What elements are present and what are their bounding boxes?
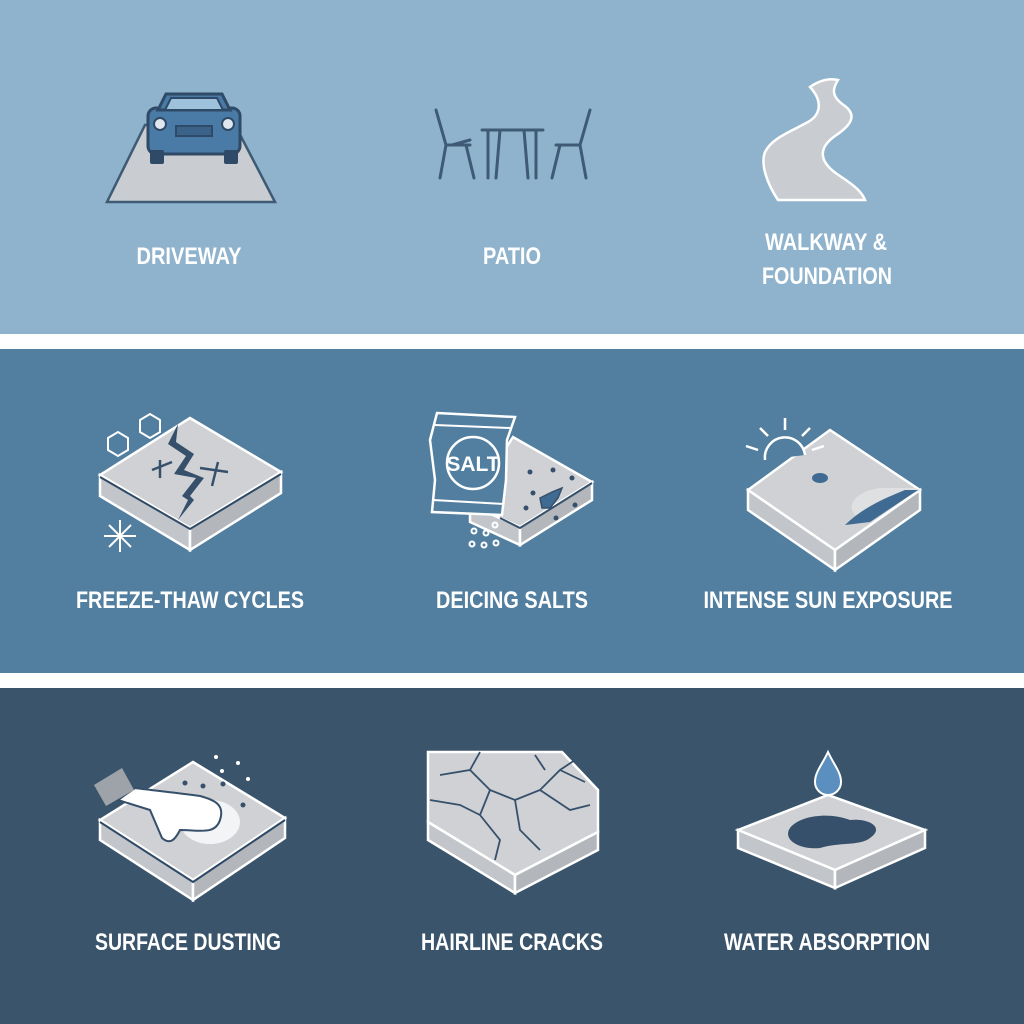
panel: damage [0, 688, 1024, 1024]
label: dusting: SURFACE DUSTING [95, 929, 281, 956]
icon: deicing salts: SALT [446, 453, 500, 476]
label: foundation: FOUNDATION [762, 263, 892, 290]
label: hairline cracks: HAIRLINE CRACKS [421, 929, 603, 956]
panel: locations [0, 0, 1024, 334]
icon: walkway [763, 79, 865, 200]
icon: deicing salts [430, 413, 592, 548]
label: driveway: DRIVEWAY [136, 243, 242, 270]
icon: hairline cracks [428, 752, 598, 893]
icon: water absorption [738, 752, 925, 888]
icon: patio [436, 110, 590, 178]
label: deicing: DEICING SALTS [436, 587, 588, 614]
icon: sun exposure [746, 418, 920, 570]
icon: freeze-thaw slab [100, 414, 281, 552]
panel: causes [0, 349, 1024, 673]
label: sun: INTENSE SUN EXPOSURE [704, 587, 952, 614]
label: freeze-thaw: FREEZE-THAW CYCLES [76, 587, 304, 614]
label: walkway & foundation: WALKWAY & [765, 229, 887, 256]
label: water absorption: WATER ABSORPTION [724, 929, 930, 956]
icon: surface dusting [94, 755, 285, 900]
label: patio: PATIO [483, 243, 541, 270]
icon: driveway car [107, 94, 275, 202]
